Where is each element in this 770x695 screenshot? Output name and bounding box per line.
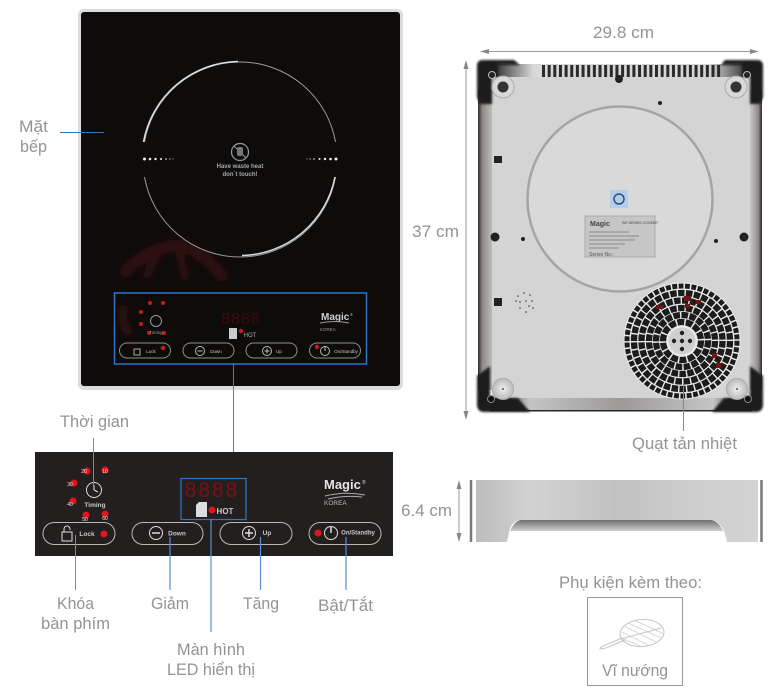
panel background [35, 452, 393, 556]
power dots left [143, 158, 174, 160]
callout: Màn hình LED hiển thị: Màn hình [177, 640, 245, 659]
callout: Bật/Tắt [318, 537, 373, 615]
icon: grill rack [600, 618, 665, 649]
callout: Giảm [151, 537, 189, 613]
timer indicators [70, 466, 322, 538]
timer numbers [67, 469, 108, 523]
up button: Up [263, 530, 271, 537]
coil plate [528, 106, 712, 292]
vents [542, 65, 722, 77]
callout: Khóa bàn phím [41, 535, 110, 633]
cooktop surface label [19, 117, 104, 156]
warning text: Have waste heat [217, 164, 263, 170]
timing indicators [139, 301, 319, 350]
cooktop top view [78, 9, 403, 390]
LED highlight box [181, 478, 246, 520]
glass surface [81, 12, 400, 386]
lock button: Lock [79, 531, 95, 538]
LED digits: 8888 [185, 479, 239, 502]
hot hand icon [196, 502, 207, 517]
red fan reflection [122, 245, 225, 335]
right edge [750, 90, 762, 390]
callout: Khóa bàn phím: Khóa [57, 594, 95, 613]
down button: Down [168, 530, 186, 538]
timing label: Timing [84, 502, 106, 509]
side ends [471, 480, 762, 542]
callout: Thời gian: Thời gian [60, 412, 129, 431]
accessories heading: Phụ kiện kèm theo: [559, 573, 702, 592]
fan hub [668, 328, 696, 354]
width dimension [480, 23, 759, 54]
rating label: INF-SERIES COOKER [622, 221, 658, 225]
speaker holes [515, 292, 534, 313]
callout: Màn hình LED hiển thị [167, 519, 255, 679]
brand logo [324, 477, 366, 507]
timer numbers: 60 [102, 516, 108, 522]
timer numbers: 50 [82, 517, 88, 523]
cooking zone ring [144, 62, 336, 257]
timing text: Timing [149, 330, 163, 335]
recycle sticker [610, 190, 628, 208]
side body [476, 480, 758, 542]
thickness dimension [401, 480, 462, 542]
brand logo: Magic [324, 477, 361, 492]
timer numbers: 40 [67, 502, 73, 508]
timer dial [86, 482, 102, 498]
callout: Quạt tản nhiệt [632, 380, 737, 453]
connector line to enlarged panel [232, 364, 234, 452]
cooktop bottom view [477, 60, 763, 412]
rating label: Series No.: [589, 252, 614, 258]
height dimension [412, 60, 468, 420]
button up [246, 343, 297, 358]
cooling fan [624, 282, 740, 400]
on/standby button: On/Standby [341, 530, 375, 536]
callout: Quạt tản nhiệt: Quạt tản nhiệt [632, 434, 737, 453]
accessory box [588, 598, 682, 686]
callout: Tăng: Tăng [243, 594, 279, 613]
brand logo: KOREA [320, 327, 336, 332]
brand logo: ® [350, 312, 353, 317]
highlight box for control panel [114, 293, 366, 364]
enlarged control panel [35, 452, 393, 556]
button up: Up [276, 349, 282, 354]
accessory name: Vĩ nướng [602, 661, 668, 680]
callout: Màn hình LED hiển thị: LED hiển thị [167, 660, 255, 679]
button down: Down [210, 349, 222, 354]
button lock: Lock [146, 349, 156, 354]
hot symbol [229, 328, 257, 339]
callout: Thời gian [60, 412, 129, 490]
fan red cells [656, 296, 721, 368]
thickness dimension: 6.4 cm [401, 501, 452, 520]
rating label [585, 216, 658, 258]
top rail [492, 64, 750, 77]
cooktop surface label: bếp [20, 137, 47, 156]
LED digits: 8888 [221, 311, 261, 328]
timer dial [150, 316, 162, 326]
button on/standby [310, 343, 360, 358]
left edge [478, 90, 492, 390]
callout: Bật/Tắt: Bật/Tắt [318, 596, 373, 615]
down button [132, 522, 203, 544]
power dots right [306, 158, 338, 160]
warning icon [232, 144, 248, 160]
side view [471, 480, 762, 542]
warning text: don`t touch! [222, 172, 258, 178]
hot symbol: HOT [244, 333, 257, 339]
height dimension: 37 cm [412, 222, 459, 241]
on/standby button [309, 522, 381, 544]
callout: Giảm: Giảm [151, 594, 189, 613]
black corner guards [477, 60, 763, 412]
brand logo: KOREA [324, 500, 347, 507]
button lock [120, 343, 170, 358]
control panel small [120, 301, 360, 358]
cooktop surface label: Mặt [19, 117, 48, 136]
brand logo [320, 312, 353, 332]
callout: Tăng [243, 537, 279, 613]
lock button [43, 522, 115, 544]
rating label: Magic [590, 221, 610, 228]
up button [220, 522, 292, 544]
button down [183, 343, 234, 358]
base plate [492, 77, 750, 398]
side cutout shadow [510, 520, 723, 531]
width dimension: 29.8 cm [593, 23, 654, 42]
timer numbers: 30 [67, 482, 73, 488]
warning text [217, 164, 263, 178]
brand logo: Magic [321, 312, 350, 323]
callout: Khóa bàn phím: bàn phím [41, 614, 110, 633]
timer numbers: 20 [81, 469, 87, 475]
screws and feet [488, 72, 752, 402]
brand logo: ® [362, 479, 366, 486]
timer numbers: 10 [102, 469, 108, 475]
cooktop silver frame [78, 9, 403, 390]
button on/standby: On/Standby [334, 349, 359, 354]
hot label: HOT [217, 507, 234, 516]
bottom rail [490, 398, 752, 410]
